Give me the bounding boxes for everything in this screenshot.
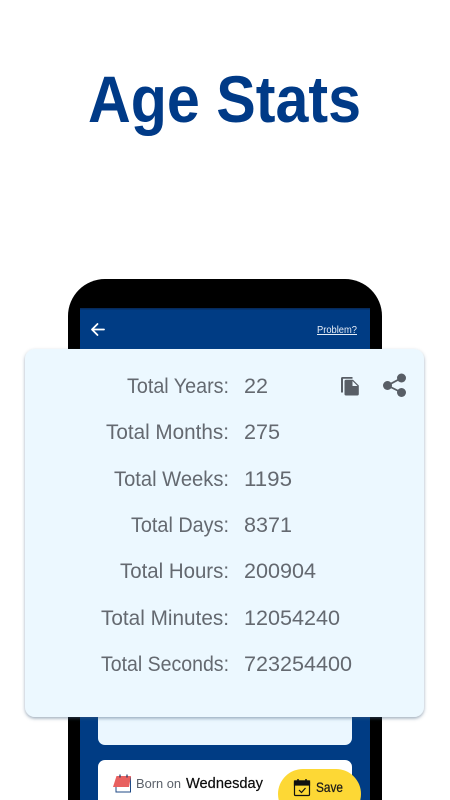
- row: total months: 275: [244, 421, 280, 444]
- title: Age Stats: [88, 62, 361, 136]
- panel: total stats card: [25, 349, 424, 717]
- row: total weeks: Total Weeks:: [114, 468, 229, 491]
- row: total months: Total Months:: [106, 421, 229, 444]
- problem link: Problem?: [317, 325, 357, 336]
- row: total hours: 200904: [244, 560, 316, 583]
- born on label: Born on: [136, 776, 181, 791]
- icon: calendar: [113, 774, 131, 792]
- results card bottom: [98, 690, 352, 745]
- row: total minutes: Total Minutes:: [101, 607, 229, 630]
- row: total minutes: [101, 607, 340, 630]
- phone mockup: [68, 279, 382, 800]
- row: total seconds: 723254400: [244, 653, 352, 676]
- weekday: Wednesday: [186, 775, 263, 792]
- icon: copy: [341, 377, 359, 396]
- stats rows: [101, 375, 352, 676]
- save label: Save: [316, 779, 343, 795]
- icon: share: [383, 374, 406, 397]
- row: total weeks: [114, 468, 292, 491]
- row: total years: 22: [244, 375, 268, 398]
- row: total years: Total Years:: [127, 375, 229, 398]
- row: total days: Total Days:: [131, 514, 229, 537]
- row: total days: 8371: [244, 514, 292, 537]
- row: total hours: [120, 560, 316, 583]
- save button: [278, 769, 361, 800]
- row: total seconds: Total Seconds:: [101, 653, 229, 676]
- born on card: [98, 760, 352, 800]
- row: total seconds: [101, 653, 352, 676]
- card background: [25, 349, 424, 717]
- row: total days: [131, 514, 292, 537]
- row: total minutes: 12054240: [244, 607, 340, 630]
- phone screen: [80, 308, 370, 800]
- icon: calendar check: [294, 779, 310, 796]
- phone body: [68, 279, 382, 800]
- row: total weeks: 1195: [244, 468, 292, 491]
- row: total hours: Total Hours:: [120, 560, 229, 583]
- icon: back arrow: [92, 324, 104, 335]
